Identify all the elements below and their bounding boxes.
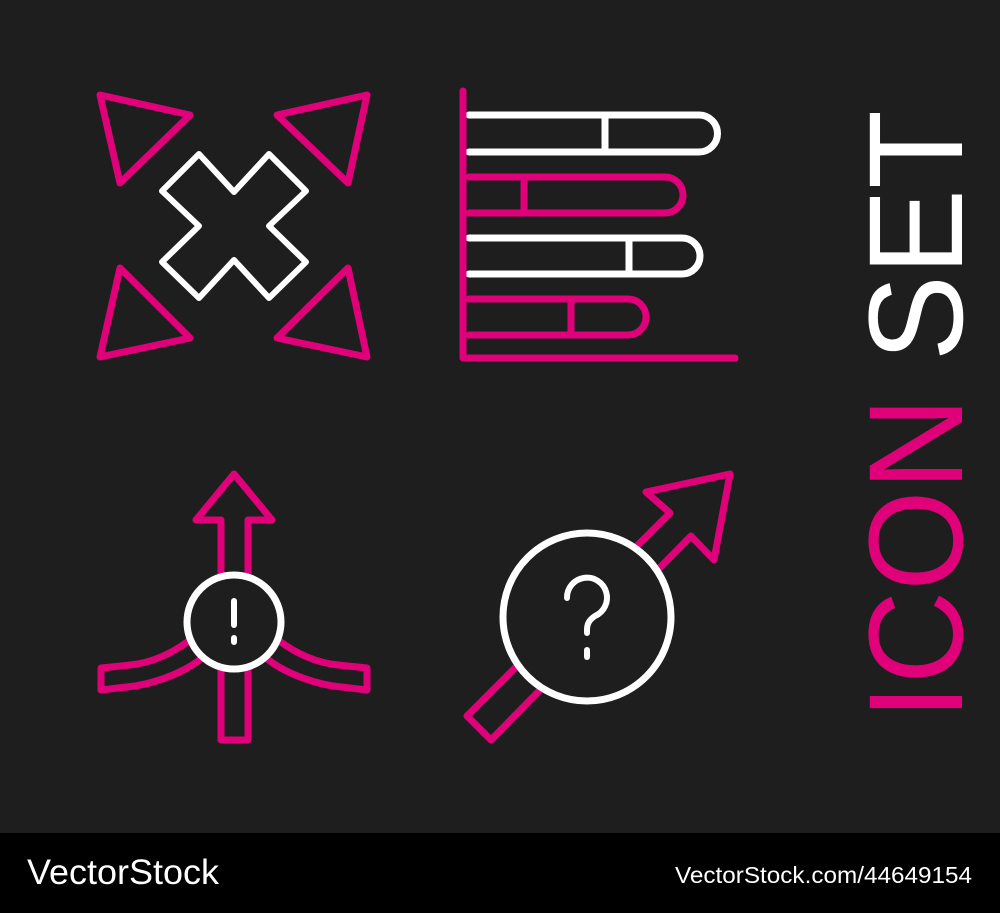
footer bar xyxy=(0,833,1000,913)
icon: move cross with four triangles xyxy=(100,95,367,357)
icon: rising arrow with question mark xyxy=(467,474,730,740)
footer: url: VectorStock.com/44649154 xyxy=(675,862,972,888)
title: ICON SET vertical: ICON SET xyxy=(842,110,991,720)
icon: branching road with exclamation xyxy=(101,474,367,740)
icon: horizontal bar chart xyxy=(463,91,735,358)
footer: brand: VectorStock xyxy=(27,853,220,892)
